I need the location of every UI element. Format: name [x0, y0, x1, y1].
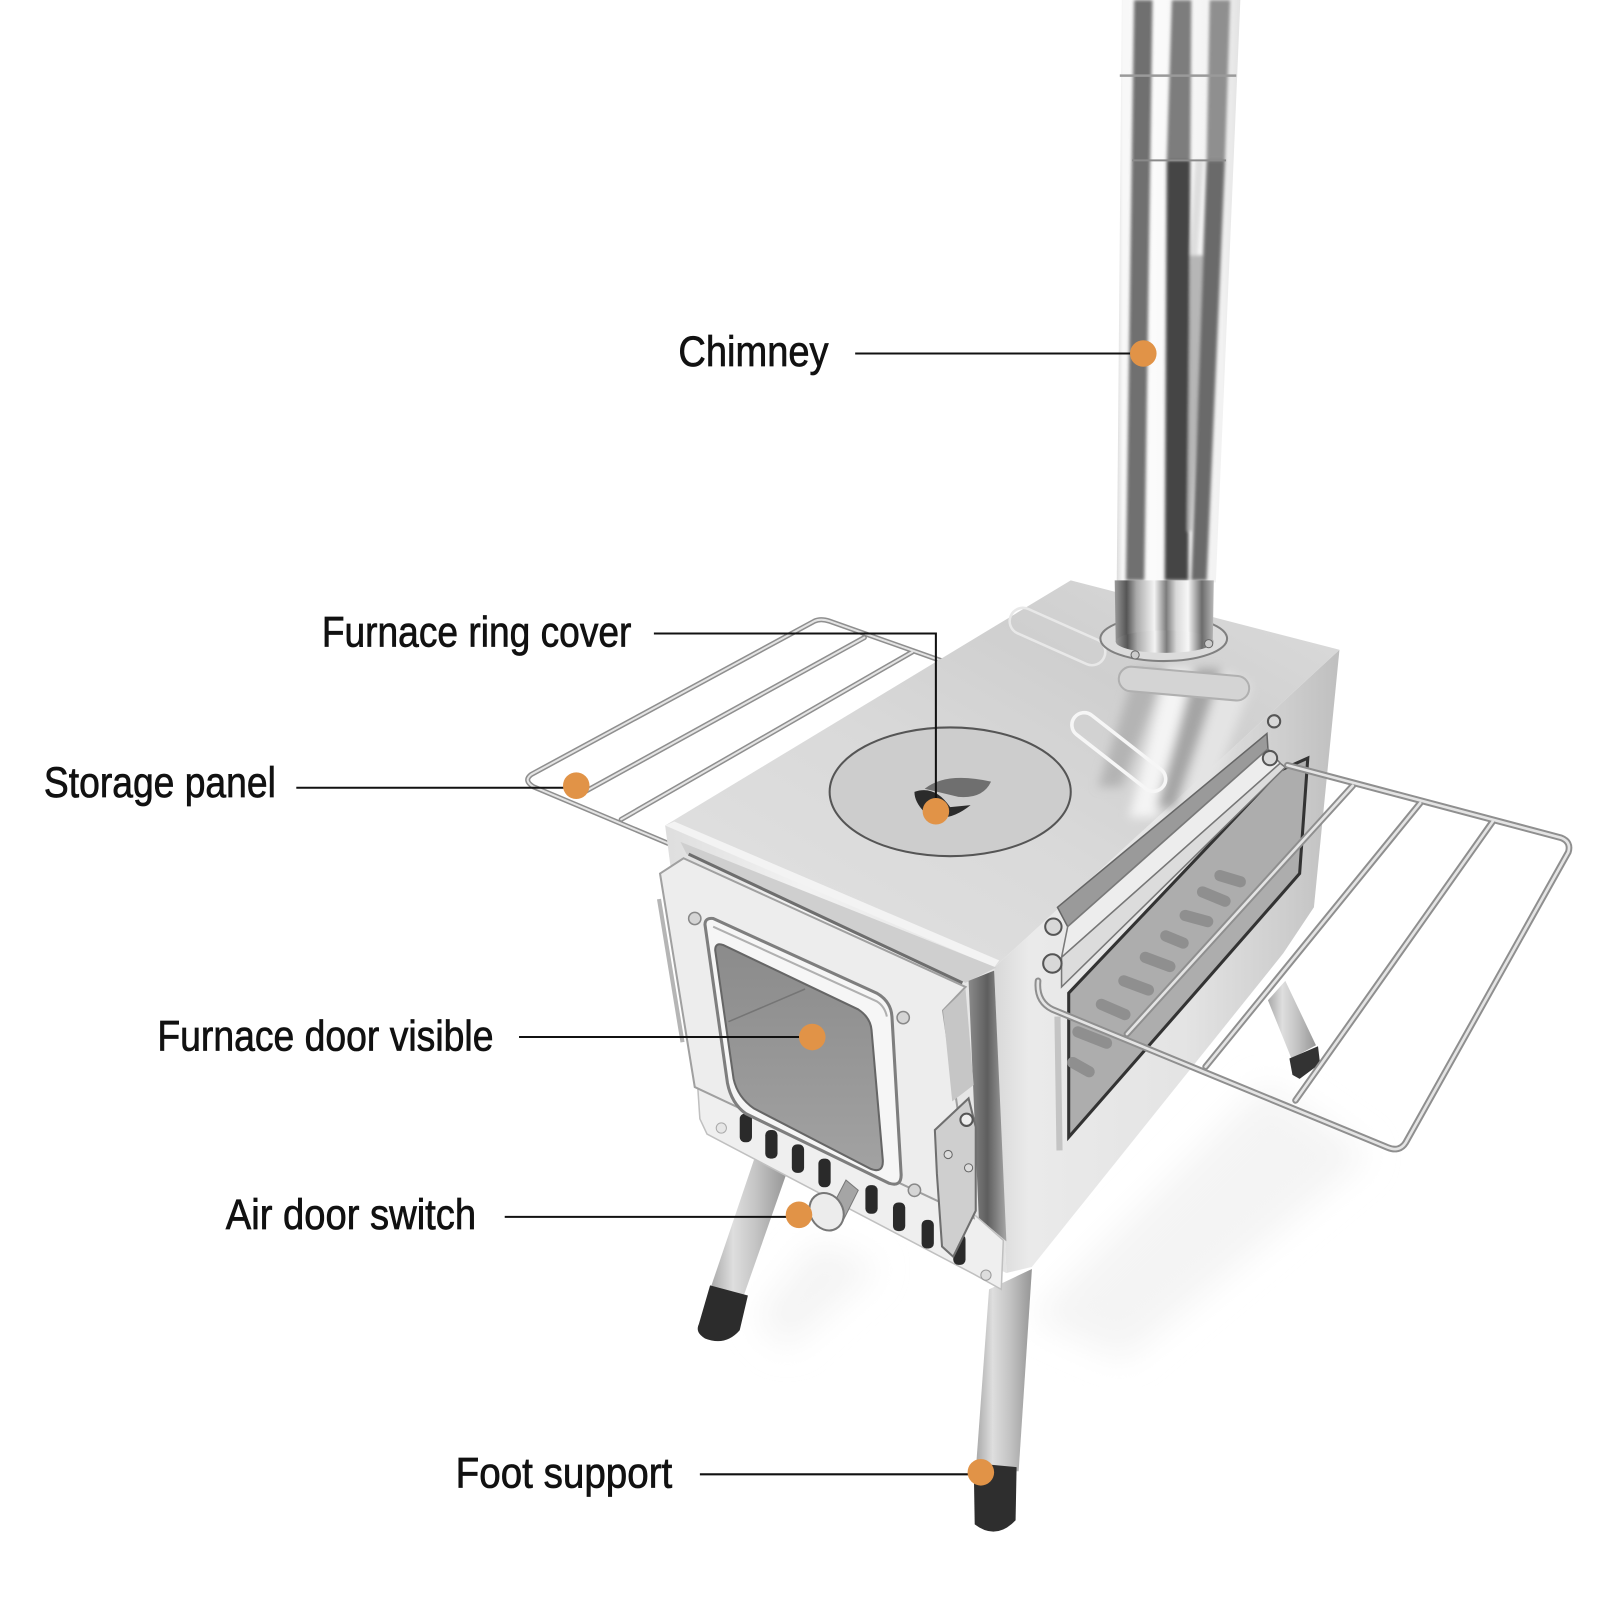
- stove body: [659, 580, 1339, 1289]
- chimney: [1100, 0, 1240, 661]
- door window frame: [705, 918, 901, 1184]
- left front leg: [698, 1160, 787, 1341]
- side face: [994, 650, 1339, 1273]
- callout: Storage panel: [44, 759, 590, 807]
- door hinge latch: [935, 1098, 976, 1257]
- front face: [665, 826, 1006, 1273]
- chimney reflections: [1126, 0, 1230, 580]
- ground shadow: [756, 1083, 1369, 1359]
- side window: [1043, 715, 1308, 1150]
- vent plate: [698, 1088, 1003, 1289]
- rear leg: [1268, 981, 1320, 1079]
- callout: Chimney: Chimney: [678, 328, 829, 376]
- callout: Foot support: [456, 1450, 994, 1498]
- furnace ring cover: [830, 727, 1071, 856]
- chimney flange: [1100, 580, 1227, 661]
- top face: [665, 580, 1339, 968]
- door window glass: [715, 944, 883, 1170]
- callout: Furnace door visible: Furnace door visible: [157, 1012, 493, 1060]
- callout: Foot support: Foot support: [456, 1450, 672, 1498]
- callout: Storage panel: Storage panel: [44, 759, 276, 807]
- right wire rack: [1038, 765, 1569, 1149]
- foot support leg: [974, 1269, 1032, 1532]
- callout: Air door switch: Air door switch: [226, 1191, 476, 1239]
- callout: Air door switch: [226, 1191, 812, 1239]
- callout: Furnace ring cover: Furnace ring cover: [322, 609, 631, 657]
- air door knob: [803, 1180, 858, 1237]
- callout: Chimney: [678, 328, 1157, 376]
- callout: Furnace ring cover: [322, 609, 949, 825]
- side door hinge rail: [1043, 715, 1285, 987]
- callout: Furnace door visible: [157, 1012, 826, 1060]
- storage panel: left wire rack: [528, 620, 945, 846]
- furnace door: [659, 858, 976, 1257]
